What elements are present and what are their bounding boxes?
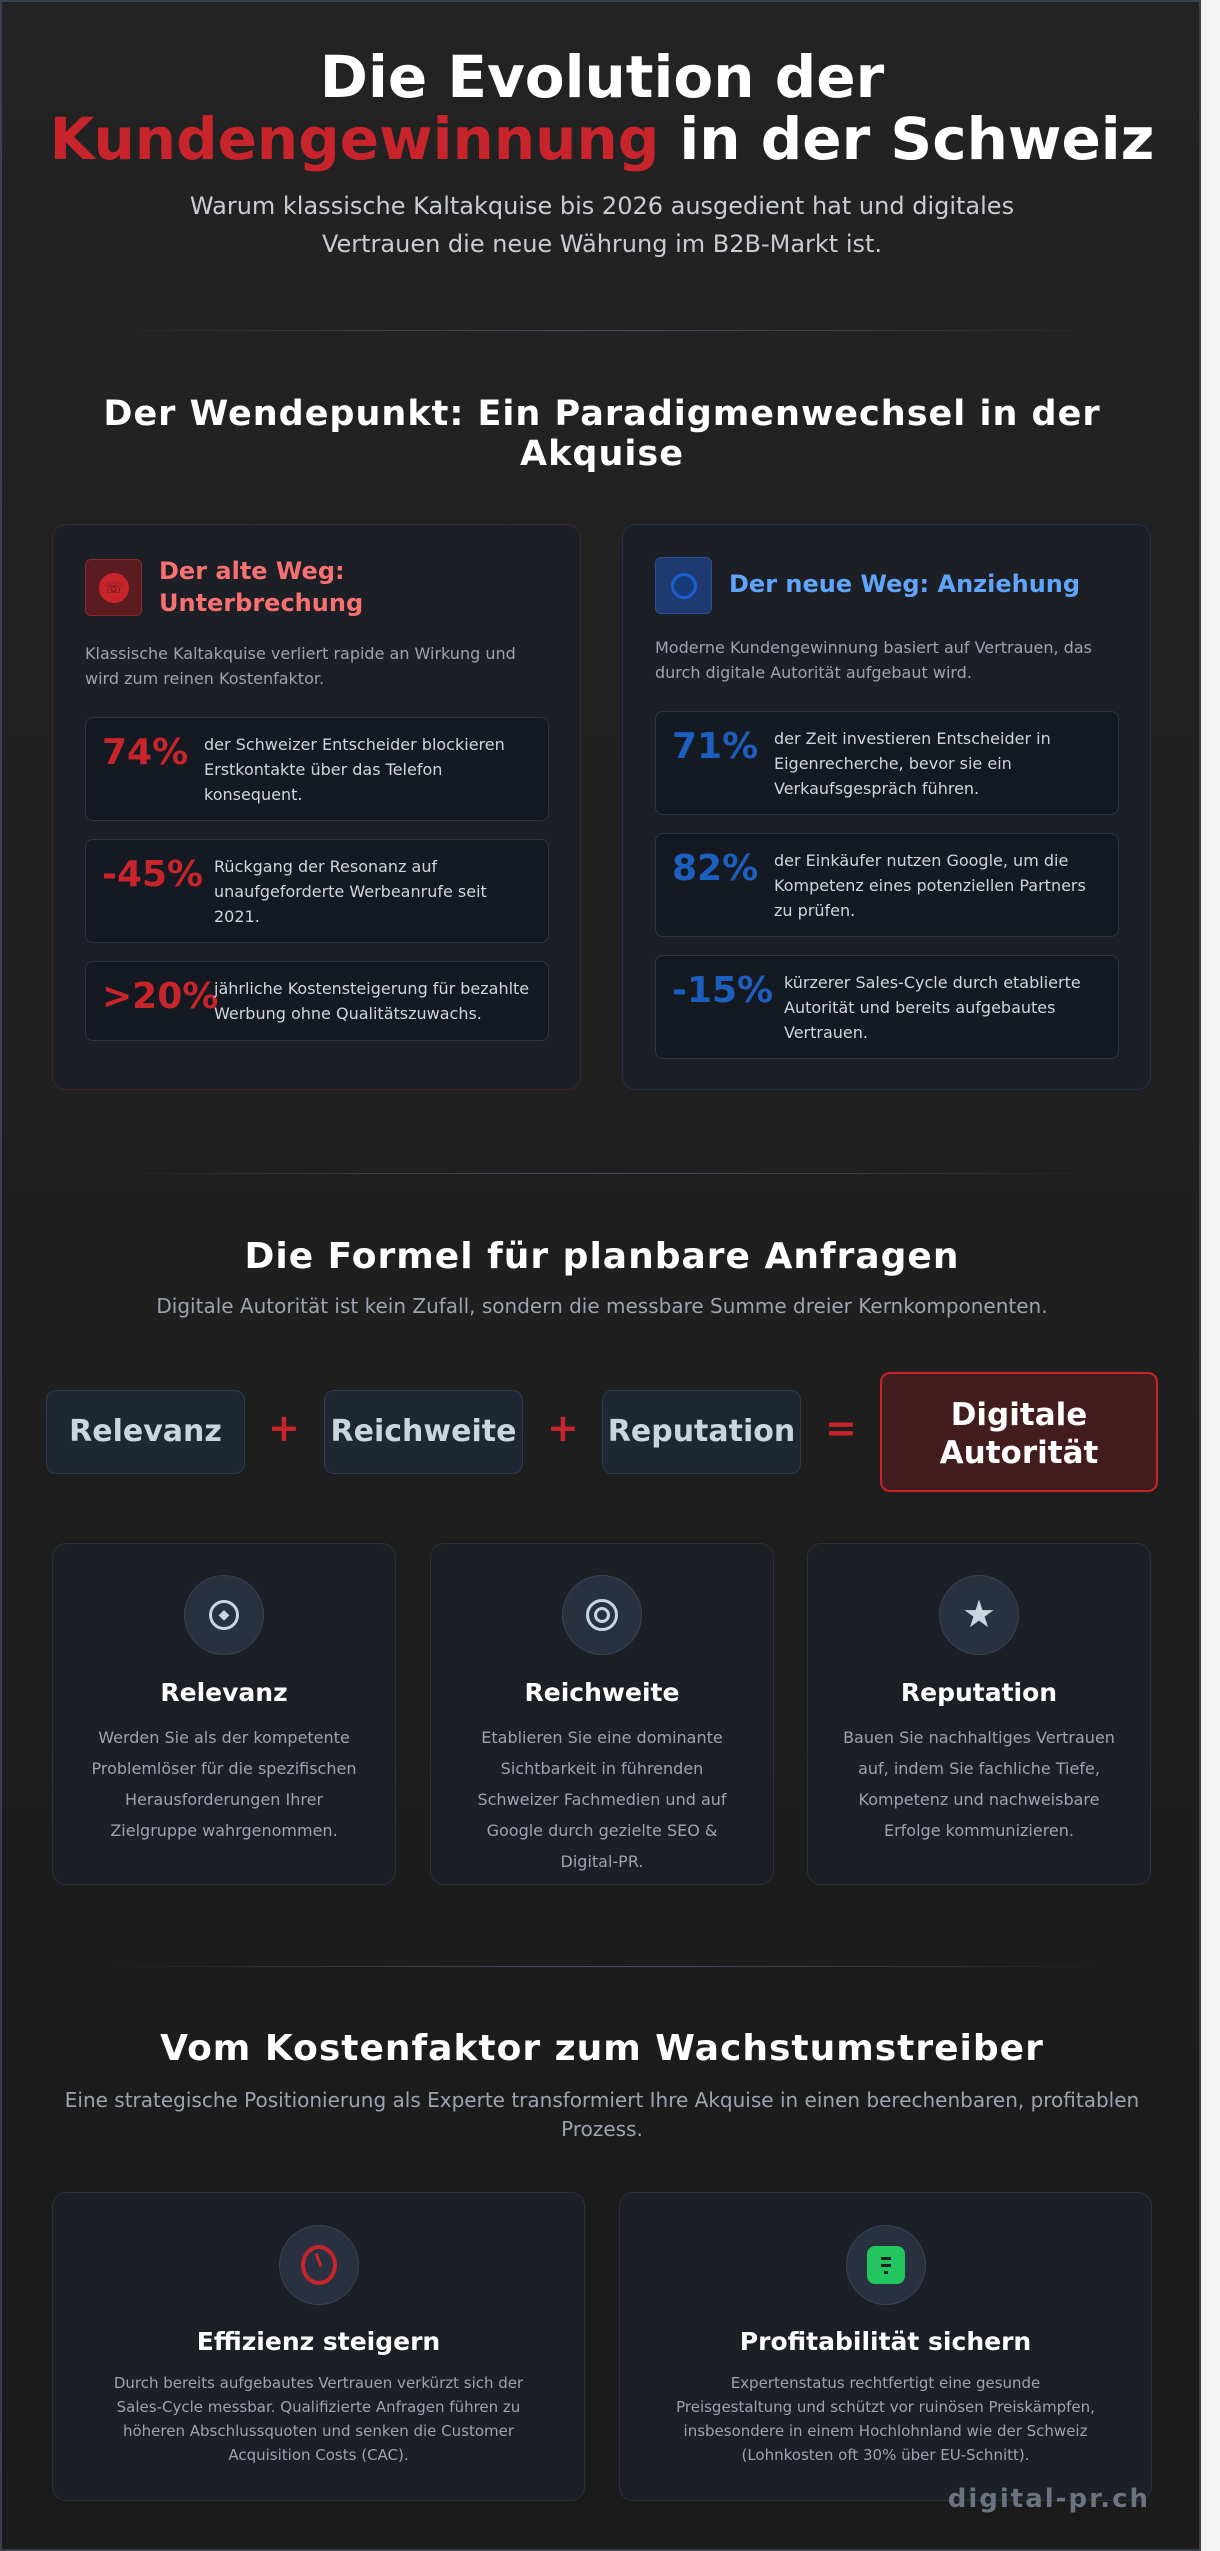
heading: Wendepunkt: Der Wendepunkt: Ein Paradigmenwechsel in der Akquise: [103, 394, 1101, 474]
icon: money: [846, 2225, 926, 2305]
icon: phone blocked: ☏: [104, 578, 124, 597]
formula: [46, 1372, 1158, 1492]
icon: globe: [655, 557, 712, 614]
box Relevanz: Relevanz: [69, 1414, 222, 1449]
card: Profitabilität: Preisgestaltung und schützt vor ruinösen Preiskämpfen, insbesondere in einem Hochlohnland wie der Schweiz (Lohnkosten oft 30% über EU-Schnitt).: [676, 2398, 1095, 2464]
stat 74%: der Schweizer Entscheider blockieren Erstkontakte über das Telefon konsequent.: [204, 735, 505, 804]
box Reputation: Reputation: [608, 1414, 795, 1449]
stat 82%: 82%: [672, 848, 758, 889]
card: Relevanz: Werden Sie als der kompetente Problemlöser für die spezifischen Herausforderungen Ihrer Zielgruppe wahrgenommen.: [92, 1728, 356, 1840]
card: Effizienz: Durch bereits aufgebautes Vertrauen verkürzt sich der Sales-Cycle messbar. Qualifizierte Anfragen führen zu höheren Abschlussquoten und senken die Customer Acquisition Costs (CAC).: [114, 2374, 523, 2464]
stat >20%: >20%: [102, 976, 218, 1017]
title: Kundengewinnung in der Schweiz: [50, 105, 1154, 173]
stat -15%: -15%: [672, 970, 773, 1011]
panel: alter Weg: [52, 524, 581, 1090]
card: Reputation: Bauen Sie nachhaltiges Vertrauen auf, indem Sie fachliche Tiefe, Kompetenz und nachweisbare Erfolge kommunizieren.: [843, 1728, 1115, 1840]
title: Die Evolution der: [320, 43, 884, 111]
subtitle: Vertrauen die neue Währung im B2B-Markt ist.: [322, 230, 882, 258]
stat -45%: [85, 839, 549, 943]
box Relevanz: [46, 1390, 245, 1474]
stat -15%: kürzerer Sales-Cycle durch etablierte Autorität und bereits aufgebautes Vertrauen.: [784, 973, 1081, 1042]
heading: alter Weg: Der alte Weg:: [159, 557, 345, 585]
stat -15%: [655, 955, 1119, 1059]
heading: alter Weg: [159, 557, 363, 617]
stat 71%: [655, 711, 1119, 815]
stat >20%: jährliche Kostensteigerung für bezahlte Werbung ohne Qualitätszuwachs.: [214, 979, 529, 1023]
icon: compass: [184, 1575, 264, 1655]
stat 82%: der Einkäufer nutzen Google, um die Kompetenz eines potenziellen Partners zu prüfen.: [774, 851, 1086, 920]
card: Effizienz: Effizienz steigern: [197, 2327, 440, 2356]
stat >20%: [85, 961, 549, 1041]
text: neuer Weg: Moderne Kundengewinnung basiert auf Vertrauen, das durch digitale Autorität aufgebaut wird.: [655, 638, 1092, 682]
box Digitale Autorität: [880, 1372, 1158, 1492]
card: Relevanz: [52, 1543, 396, 1885]
subtitle: [190, 192, 1014, 258]
heading: alter Weg: Unterbrechung: [159, 589, 363, 617]
box Reputation: [602, 1390, 801, 1474]
title: [50, 43, 1154, 173]
icon: star: [939, 1575, 1019, 1655]
stat 82%: [655, 833, 1119, 937]
heading: Formel: Die Formel für planbare Anfragen: [244, 1236, 959, 1277]
text: alter Weg: Klassische Kaltakquise verliert rapide an Wirkung und wird zum reinen Kostenfaktor.: [85, 644, 516, 688]
subtitle: Warum klassische Kaltakquise bis 2026 ausgedient hat und digitales: [190, 192, 1014, 220]
card: Reputation: [807, 1543, 1151, 1885]
heading: Kostenfaktor: Vom Kostenfaktor zum Wachstumstreiber: [160, 2028, 1044, 2069]
panel: neuer Weg: [622, 524, 1151, 1090]
icon: target: [562, 1575, 642, 1655]
icon: clock: [278, 2225, 358, 2305]
plus: +: [268, 1406, 300, 1450]
card: Profitabilität: Expertenstatus rechtfertigt eine gesunde: [731, 2374, 1040, 2392]
plus 2: +: [547, 1406, 579, 1450]
subtitle: Kostenfaktor: Eine strategische Positionierung als Experte transformiert Ihre Akquise in einen berechenbaren, profitablen Prozess.: [65, 2088, 1139, 2141]
card: Reichweite: [430, 1543, 774, 1885]
card: Relevanz: Relevanz: [160, 1678, 288, 1707]
card: Profitabilität: Profitabilität sichern: [740, 2327, 1031, 2356]
stat -45%: Rückgang der Resonanz auf unaufgeforderte Werbeanrufe seit 2021.: [214, 857, 487, 926]
watermark: digital-pr.ch: [948, 2484, 1150, 2514]
box Digitale Autorität: Digitale: [951, 1397, 1087, 1433]
equals: =: [825, 1406, 857, 1450]
box Reichweite: [324, 1390, 523, 1474]
icon: phone blocked: [85, 559, 142, 616]
heading: neuer Weg: Der neue Weg: Anziehung: [729, 570, 1080, 598]
card: Profitabilität: [619, 2192, 1152, 2501]
box Reichweite: Reichweite: [331, 1414, 516, 1449]
icon: star: ★: [962, 1592, 996, 1636]
subtitle: Formel: Digitale Autorität ist kein Zufall, sondern die messbare Summe dreier Kernkomponenten.: [156, 1294, 1048, 1318]
stat 74%: [85, 717, 549, 821]
card: Effizienz: [52, 2192, 585, 2501]
box Digitale Autorität: Autorität: [940, 1435, 1098, 1471]
card: Reichweite: Reichweite: [525, 1678, 679, 1707]
stat 71%: der Zeit investieren Entscheider in Eigenrecherche, bevor sie ein Verkaufsgespräch führen.: [774, 729, 1051, 798]
stat 74%: 74%: [102, 732, 188, 773]
icon: compass: ◆: [219, 1607, 229, 1623]
stat -45%: -45%: [102, 854, 203, 895]
card: Reputation: Reputation: [901, 1678, 1057, 1707]
card: Reichweite: Etablieren Sie eine dominante Sichtbarkeit in führenden Schweizer Fachmedien und auf Google durch gezielte SEO & Digital-PR.: [477, 1728, 727, 1871]
stat 71%: 71%: [672, 726, 758, 767]
